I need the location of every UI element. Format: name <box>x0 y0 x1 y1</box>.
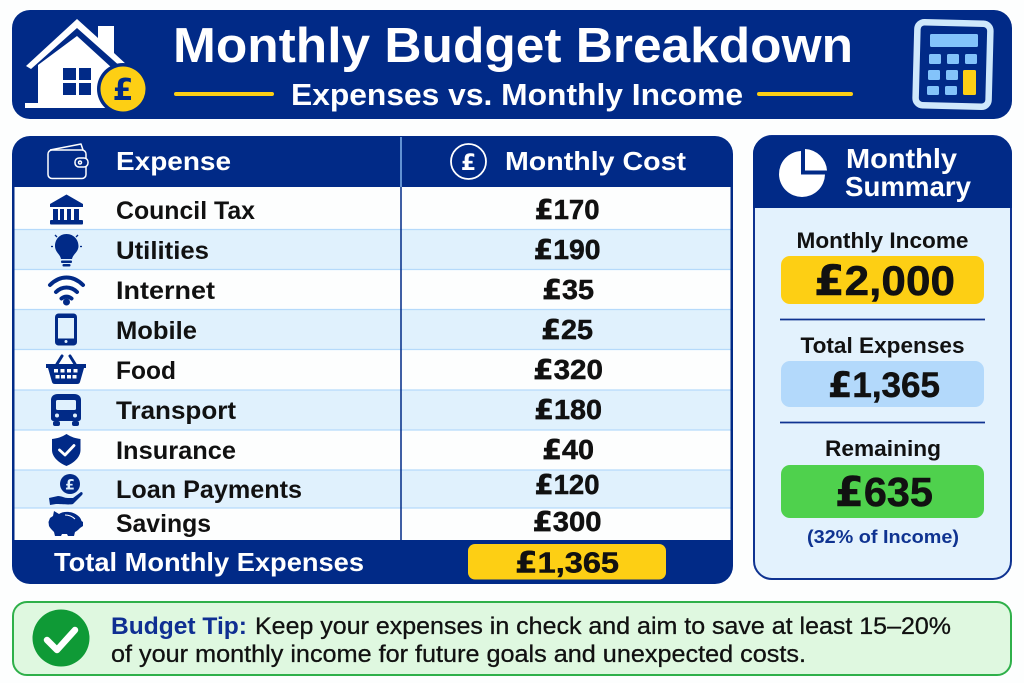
icon: hand holding pound coin <box>49 474 83 505</box>
row: Internet: Internet <box>116 277 216 305</box>
row: Utilities: £190 <box>534 233 600 266</box>
icon: calculator <box>915 22 991 107</box>
row: Internet: £35 <box>542 273 594 306</box>
row: Transport: £180 <box>534 393 602 426</box>
table rows background <box>14 137 730 540</box>
stat: monthly income: £2,000 <box>814 256 955 305</box>
subtitle: Expenses vs. Monthly Income <box>291 77 743 112</box>
tip text <box>111 613 951 668</box>
icon: house with pound coin: £ <box>113 73 133 108</box>
icon: hand holding pound coin: £ <box>65 478 75 494</box>
heading: Monthly Cost: Monthly Cost <box>505 146 686 176</box>
icon: light bulb <box>51 234 82 266</box>
header banner <box>12 10 1012 119</box>
stat: remaining: £635 <box>835 468 933 516</box>
icon: shopping basket <box>46 356 86 384</box>
row: Savings: Savings <box>116 510 211 538</box>
row: Insurance: Insurance <box>116 437 236 465</box>
row: Utilities <box>51 233 600 266</box>
panel: budget tip <box>13 602 1011 675</box>
row: Mobile <box>55 313 593 346</box>
icon: pie chart <box>779 149 827 197</box>
row: Mobile: Mobile <box>116 317 197 345</box>
icon: piggy bank <box>48 511 83 536</box>
icon: pound circle <box>451 144 486 179</box>
icon: green check circle <box>32 610 90 666</box>
icon: wifi <box>50 278 83 304</box>
panel: monthly summary <box>753 136 1012 579</box>
row: Transport: Transport <box>116 397 237 425</box>
remaining percentage note: (32% of Income) <box>807 526 959 547</box>
row: Utilities: Utilities <box>116 237 209 265</box>
icon: bank <box>50 194 83 224</box>
tip text: Keep your expenses in check and aim to save at least 15–20% <box>255 613 951 640</box>
row: Insurance <box>52 433 594 466</box>
left subtitle rule <box>174 92 274 96</box>
heading: Expense: Expense <box>116 146 231 176</box>
stat: total expenses <box>781 333 984 407</box>
icon: house with pound coin <box>25 19 149 115</box>
summary header <box>753 136 1012 208</box>
row: Savings: £300 <box>532 505 602 538</box>
stat: monthly income: Monthly Income <box>796 228 968 253</box>
row: Internet <box>50 273 594 306</box>
summary heading: Summary <box>845 171 971 202</box>
panel: expense table <box>12 136 733 584</box>
total row value: £1,365 <box>515 546 619 580</box>
icon: shield check <box>52 434 80 466</box>
row: Mobile: £25 <box>541 313 593 346</box>
row: Loan Payments: Loan Payments <box>116 476 302 504</box>
right subtitle rule <box>757 92 853 96</box>
title: Monthly Budget Breakdown <box>173 19 853 73</box>
row: Food: £320 <box>533 353 603 386</box>
row: Council Tax <box>50 193 600 226</box>
row: Loan Payments: £120 <box>534 468 600 501</box>
stat: remaining <box>781 436 984 547</box>
total row label: Total Monthly Expenses <box>54 547 364 577</box>
tip text: Budget Tip: <box>111 613 247 640</box>
row: Food <box>46 353 603 386</box>
row: Transport <box>51 393 602 426</box>
icon: smartphone <box>55 314 77 346</box>
icon: wallet <box>48 144 88 178</box>
total row value <box>468 544 666 580</box>
icon: bus <box>51 394 81 426</box>
stat: monthly income <box>781 228 984 305</box>
row: Food: Food <box>116 357 176 385</box>
row: Loan Payments <box>49 468 600 505</box>
icon: pound circle: £ <box>461 151 476 176</box>
summary heading: Monthly <box>846 143 957 174</box>
stat: total expenses: £1,365 <box>828 366 940 406</box>
tip text: of your monthly income for future goals and unexpected costs. <box>111 641 806 668</box>
row: Savings <box>48 505 602 538</box>
stat: remaining: Remaining <box>825 436 941 461</box>
row: Council Tax: £170 <box>534 193 600 226</box>
row: Council Tax: Council Tax <box>116 197 255 225</box>
row: Insurance: £40 <box>542 433 594 466</box>
stat: total expenses: Total Expenses <box>800 333 964 358</box>
